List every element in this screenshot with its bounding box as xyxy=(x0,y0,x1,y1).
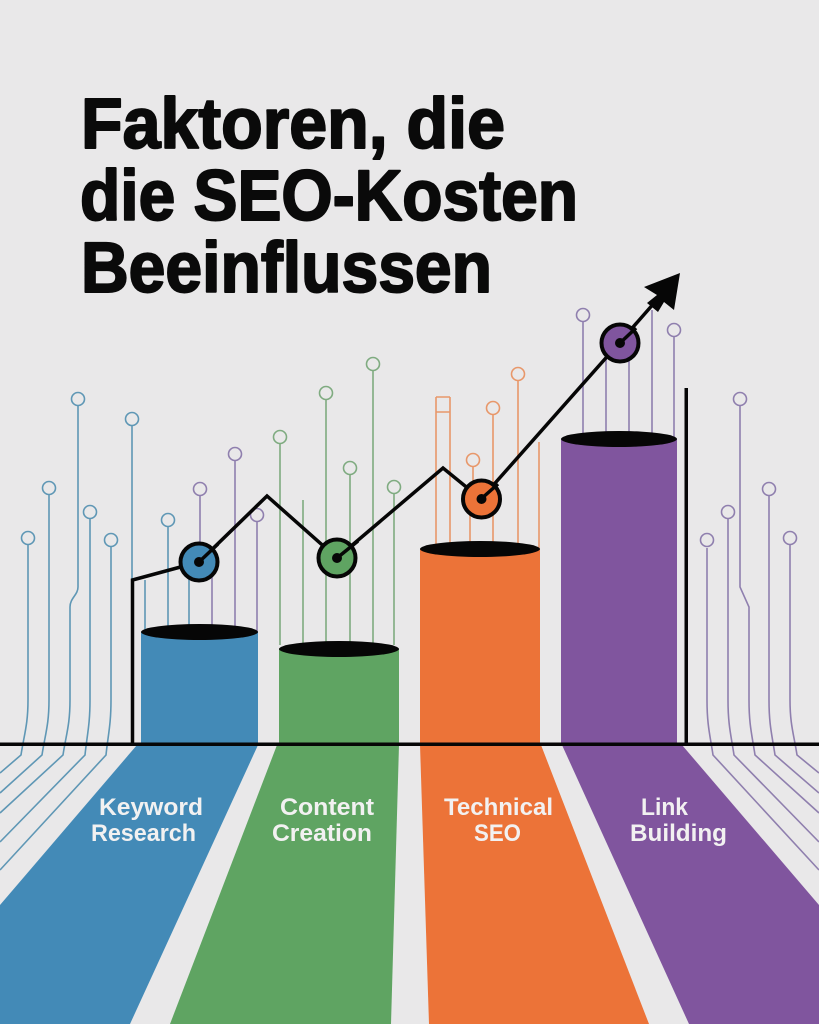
label: link building: Building xyxy=(630,820,727,847)
marker: purple xyxy=(602,324,638,362)
label: content creation: Creation xyxy=(272,820,372,847)
purple lines over blue bar xyxy=(194,448,264,632)
rays below the baseline xyxy=(0,745,819,1024)
label: content creation: Content xyxy=(280,794,374,821)
label: keyword research: Research xyxy=(91,820,196,847)
bar: link building xyxy=(561,431,677,745)
bar: keyword research xyxy=(141,624,258,745)
title xyxy=(80,85,578,308)
label: technical seo: Technical xyxy=(444,794,553,821)
green bar lines xyxy=(274,358,400,645)
label: keyword research xyxy=(91,794,203,847)
label: technical seo xyxy=(444,794,553,847)
label: link building: Link xyxy=(641,794,689,821)
orange bar lines xyxy=(436,368,539,548)
label: keyword research: Keyword xyxy=(99,794,203,821)
label: content creation xyxy=(272,794,374,847)
title: Faktoren, die xyxy=(81,85,505,164)
bar: content creation xyxy=(279,641,399,745)
label: link building xyxy=(630,794,727,847)
purple bar lines xyxy=(576,308,680,437)
bar: technical seo xyxy=(420,541,540,745)
title: die SEO-Kosten xyxy=(80,157,578,236)
left circuit lines xyxy=(0,392,118,870)
right axis line xyxy=(684,388,688,744)
trend line with arrow xyxy=(132,273,680,744)
label: technical seo: SEO xyxy=(474,820,521,847)
title: Beeinflussen xyxy=(81,229,492,308)
marker: blue xyxy=(180,544,218,580)
arrow head xyxy=(644,273,680,312)
blue bar lines xyxy=(126,412,189,630)
baseline axis xyxy=(0,742,819,746)
right circuit lines xyxy=(700,392,819,870)
marker: orange xyxy=(463,480,500,518)
marker: green xyxy=(318,540,358,576)
